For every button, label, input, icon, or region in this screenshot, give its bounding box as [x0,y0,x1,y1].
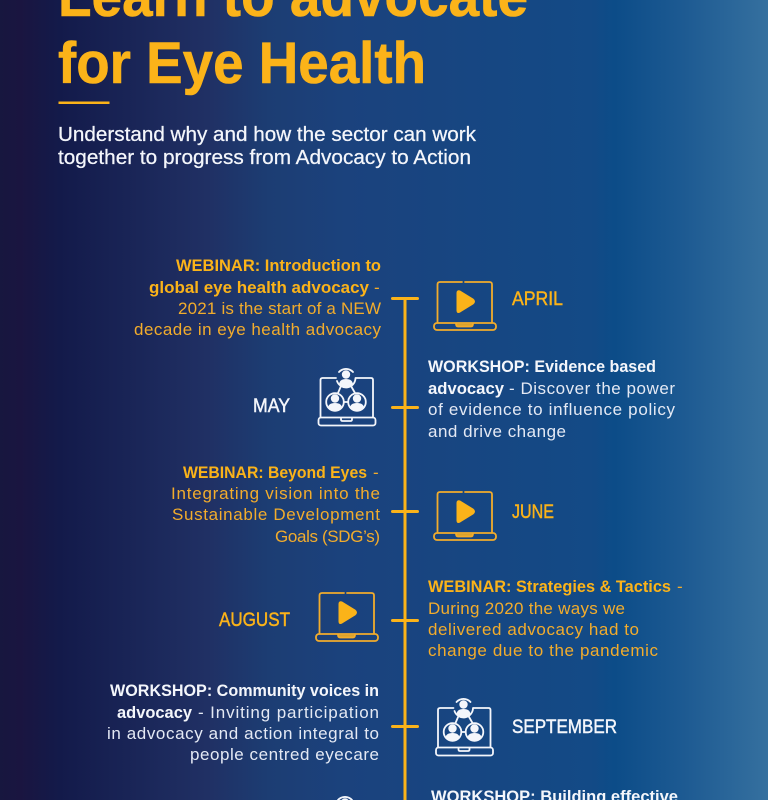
month: May: MAY [253,396,290,417]
title [58,0,528,96]
timeline [391,297,419,800]
month: June: JUNE [512,502,554,523]
text: September workshop: WORKSHOP: Community voices in [110,681,379,700]
text: April webinar: decade in eye health advocacy [134,320,382,339]
text: June webinar: WEBINAR: Beyond Eyes [183,463,367,482]
text: August webinar: WEBINAR: Strategies & Tactics [428,577,671,596]
text: June webinar: Integrating vision into the [171,484,380,503]
text: May workshop: - Discover the power [509,379,675,398]
icon: play laptop April [434,282,496,330]
text: April webinar: 2021 is the start of a NEW [178,299,381,318]
text: August webinar: During 2020 the ways we [428,599,625,618]
text: April webinar: global eye health advocacy [149,278,370,297]
icon: people laptop cut off at bottom [318,797,374,800]
text: May workshop: advocacy [428,379,505,398]
title: for Eye Health [58,31,426,96]
text: April webinar: WEBINAR: Introduction to [176,256,381,275]
text: August webinar: change due to the pandemic [428,641,658,660]
text: May workshop: WORKSHOP: Evidence based [428,357,656,376]
text: September workshop: - Inviting participation [198,703,379,722]
month: September: SEPTEMBER [512,717,617,738]
text: September workshop: people centred eyecare [190,745,379,764]
text: May workshop [428,357,676,441]
subtitle: together to progress from Advocacy to Action [58,147,471,169]
text: September workshop: in advocacy and action integral to [107,724,379,743]
text: September workshop: advocacy [117,703,193,722]
subtitle: Understand why and how the sector can work [58,124,477,146]
month: August: AUGUST [219,610,290,631]
text: August webinar: delivered advocacy had to [428,620,639,639]
text: May workshop: of evidence to influence policy [428,400,676,419]
text: April webinar [134,256,382,339]
text: April webinar: - [374,278,380,297]
title underline [58,102,110,104]
text: June webinar [171,463,380,546]
icon: people laptop September [436,699,493,756]
text: August webinar: - [677,577,683,596]
text: September workshop [107,681,379,764]
text: June webinar: - [373,463,379,482]
icon: people laptop May [318,369,376,426]
icon: play laptop June [434,492,496,540]
text: August webinar [428,577,683,660]
text: June webinar: Goals (SDG’s) [275,527,380,546]
month: April: APRIL [512,289,563,310]
icon: play laptop August [316,593,378,641]
subtitle [58,124,477,169]
text: May workshop: and drive change [428,422,566,441]
text: June webinar: Sustainable Development [172,505,380,524]
